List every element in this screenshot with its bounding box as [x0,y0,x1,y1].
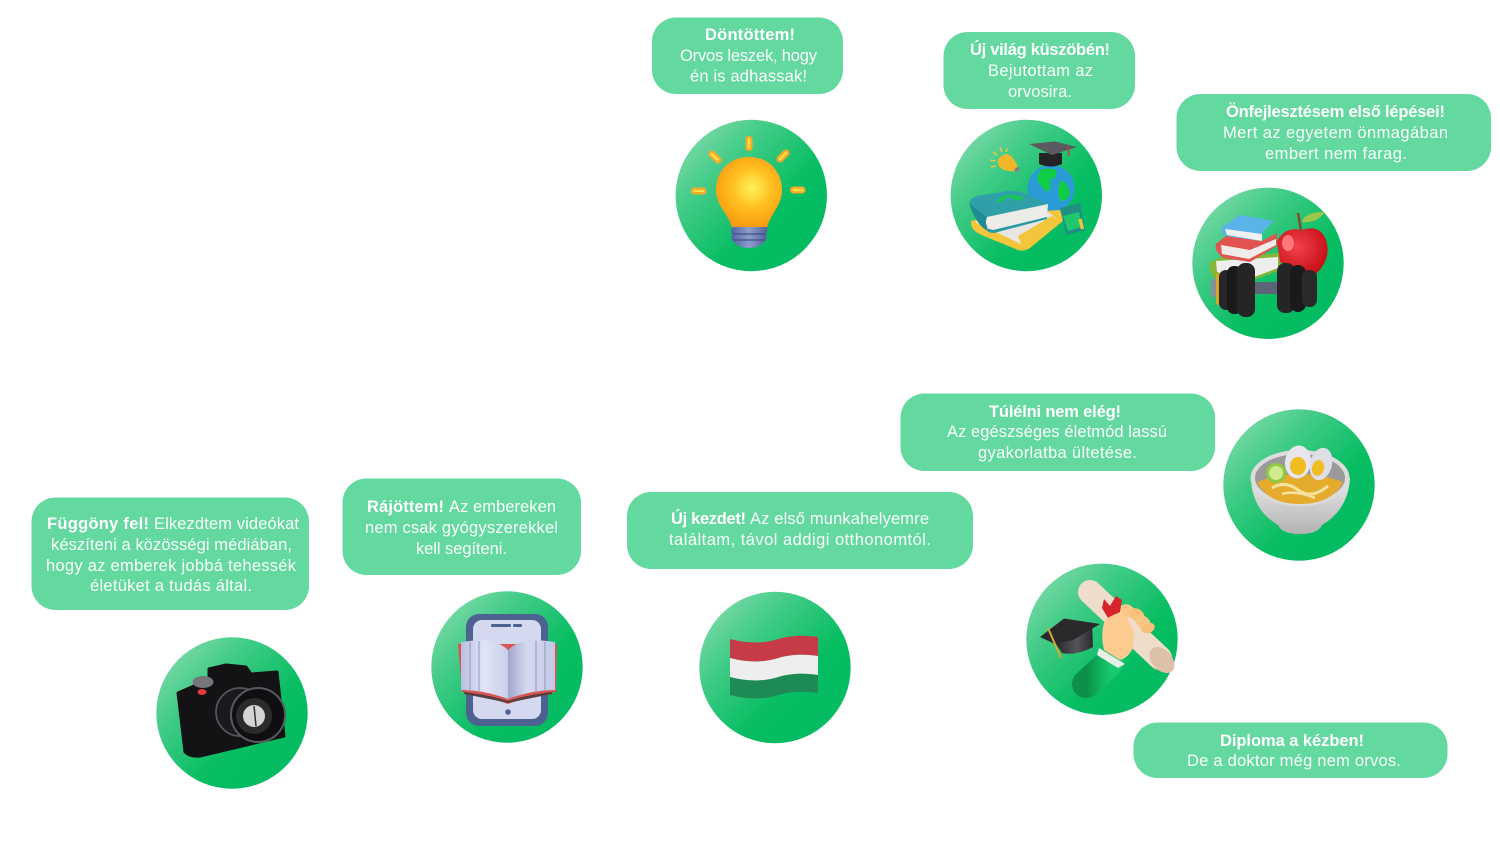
circle: tablet with open book [431,591,583,743]
circle: light bulb [676,120,827,271]
circle: soup bowl with eggs [1223,409,1375,561]
circle: hand holding diploma with cap [1026,564,1179,715]
bubble: Függöny fel: Elkezdtem videókat [154,515,299,533]
bubble: Túlélni nem elég: Az egészséges életmód lassú [947,423,1167,441]
bubble: Rájöttem: Az embereken [449,498,556,516]
circle: books, apple and dumbbell [1192,188,1344,339]
bubble: Új kezdet: Az első munkahelyemre [750,510,929,528]
bubble: Döntöttem: Döntöttem! [705,26,795,44]
bubble: Új világ küszöbén [944,32,1135,109]
bubble: Önfejlesztésem első lépései [1176,94,1491,171]
bubble: Rájöttem: Rájöttem! [367,498,444,516]
bubble: Függöny fel: Függöny fel! [47,515,149,533]
bubble: Rájöttem [342,478,581,575]
bubble: Új kezdet: Új kezdet! [671,509,746,528]
bubble: Függöny fel [32,498,309,610]
circle: Hungarian flag [699,592,851,743]
bubble: Új világ küszöbén: Új világ küszöbén! [970,40,1110,59]
bubble: Diploma a kézben [1134,722,1448,778]
bubble: Diploma a kézben: Diploma a kézben! [1220,732,1364,750]
circle: camera [156,637,308,789]
bubble: Rájöttem: kell segíteni. [416,540,507,558]
bubble: Függöny fel: készíteni a közösségi médiában, [51,536,292,554]
bubble: Döntöttem: én is adhassak! [690,68,807,86]
bubble: Új kezdet [627,492,973,569]
bubble: Függöny fel: életüket a tudás által. [90,577,252,595]
bubble: Új világ küszöbén: orvosira. [1008,83,1072,101]
bubble: Túlélni nem elég: gyakorlatba ültetése. [978,444,1137,462]
bubble: Diploma a kézben: De a doktor még nem orvos. [1187,752,1401,770]
circle: books, globe and graduation cap [951,120,1102,271]
bubble: Önfejlesztésem első lépései: Mert az egyetem önmagában [1223,124,1448,142]
bubble: Önfejlesztésem első lépései: embert nem farag. [1265,145,1407,163]
bubble: Döntöttem [652,18,843,94]
bubble: Önfejlesztésem első lépései: Önfejlesztésem első lépései! [1226,102,1445,121]
bubble: Döntöttem: Orvos leszek, hogy [680,47,818,65]
bubble: Túlélni nem elég [900,394,1215,471]
bubble: Új kezdet: találtam, távol addigi otthonomtól. [669,531,931,549]
bubble: Függöny fel: hogy az emberek jobbá tehessék [46,557,297,575]
bubble: Rájöttem: nem csak gyógyszerekkel [365,519,558,537]
bubble: Túlélni nem elég: Túlélni nem elég! [989,403,1121,421]
bubble: Új világ küszöbén: Bejutottam az [988,62,1093,80]
